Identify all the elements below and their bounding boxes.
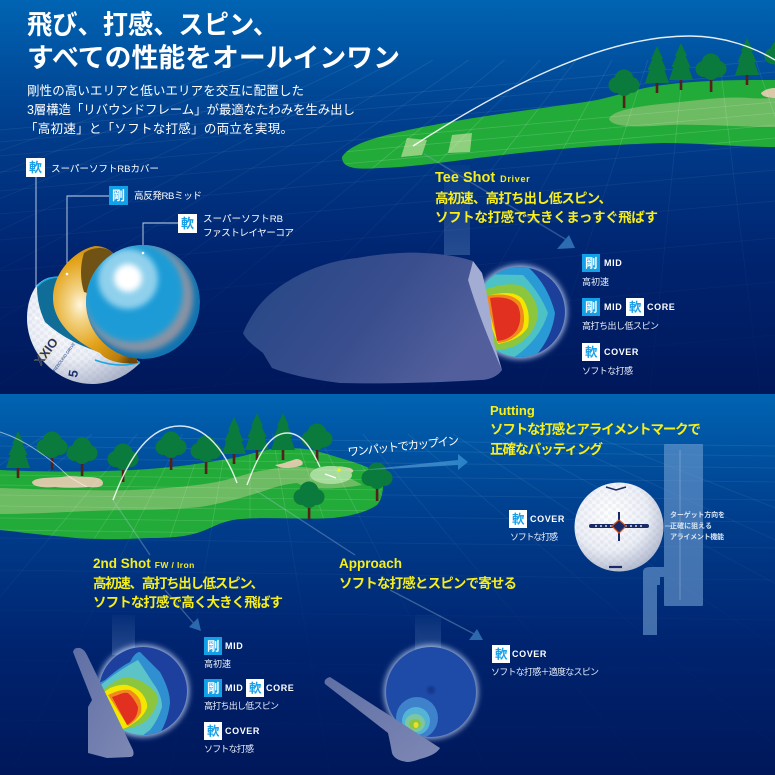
heading: 2nd shot xyxy=(93,556,283,610)
callout: approach cover: 軟 xyxy=(495,646,508,662)
arrow: one putt: ワンパットでカップイン xyxy=(347,434,460,459)
callout: putting cover: ソフトな打感 xyxy=(510,531,558,542)
layer label: core: 軟 xyxy=(181,216,194,231)
callout: cover: 軟 xyxy=(207,724,220,738)
callout: mid: MID xyxy=(604,258,622,268)
trees: tee shot hole xyxy=(608,38,775,108)
callout: mid: 剛 xyxy=(207,640,220,654)
heading: approach: Approach xyxy=(339,556,402,571)
callout: cover: ソフトな打感 xyxy=(582,365,633,376)
heading: putting xyxy=(490,403,701,457)
annotation: alignment: ターゲット方向を xyxy=(670,510,725,519)
illustration: iron head xyxy=(73,648,134,758)
callout: cover: COVER xyxy=(604,347,639,357)
heading: 2nd shot: ソフトな打感で高く大きく飛ばす xyxy=(93,594,283,610)
leader lines xyxy=(36,177,178,318)
ball cover shell: XXIO xyxy=(32,335,61,368)
mid layer xyxy=(53,246,138,363)
callout: putting cover: 軟 xyxy=(512,512,525,526)
heading: tee shot xyxy=(435,170,658,225)
heading: putting: ソフトな打感とアライメントマークで xyxy=(490,421,701,437)
layer label: core: ファストレイヤーコア xyxy=(203,228,294,239)
title: すべての性能をオールインワン xyxy=(27,43,400,73)
layer label: cover: 軟 xyxy=(29,160,42,175)
intro text xyxy=(25,83,355,136)
callout: mid and core: MID xyxy=(604,302,622,312)
annotation: alignment xyxy=(665,510,725,541)
layer label: mid: 高反発RBミッド xyxy=(134,190,202,202)
ball cover shell: REBOUND DRIVE xyxy=(52,341,76,373)
callout: mid and core xyxy=(582,298,675,331)
pointer: tee shot to driver xyxy=(424,154,575,255)
heading: approach: ソフトな打感とスピンで寄せる xyxy=(339,575,517,591)
layer label: mid: 剛 xyxy=(112,188,125,203)
diagram: driver impact heatmap xyxy=(470,258,567,362)
callout: putting cover xyxy=(509,510,565,542)
trees: green course xyxy=(6,413,392,520)
intro text: 「高初速」と「ソフトな打感」の両立を実現。 xyxy=(25,121,293,136)
diagram: ball layers xyxy=(27,177,200,384)
intro text: 3層構造「リバウンドフレーム」が最適なたわみを生み出し xyxy=(27,102,355,117)
callout: cover xyxy=(582,343,639,376)
layer label: mid xyxy=(109,186,202,205)
callout: mid: MID xyxy=(225,641,243,651)
callout: mid: 高初速 xyxy=(582,276,609,287)
panel: bottom background xyxy=(0,394,775,775)
illustration: green course xyxy=(0,448,384,540)
arrowheads xyxy=(189,618,483,640)
callout: mid xyxy=(582,254,622,287)
illustration: putter xyxy=(643,444,703,635)
panel: top background xyxy=(0,0,775,394)
heading: 2nd shot: 高初速、高打ち出し低スピン、 xyxy=(93,575,264,591)
callouts: iron xyxy=(204,637,294,754)
heading: approach xyxy=(339,556,517,591)
ball cover shell: 5 xyxy=(65,369,81,379)
callout: mid and core: 剛 xyxy=(207,682,220,696)
illustration: tee shot fairway xyxy=(342,80,775,169)
illustration: driver head xyxy=(243,253,502,383)
callout: putting cover: COVER xyxy=(530,514,565,524)
callout: cover: ソフトな打感 xyxy=(204,743,254,754)
arrow: one putt xyxy=(347,434,468,471)
title: 飛び、打感、スピン、 xyxy=(27,10,278,40)
callout: mid and core: CORE xyxy=(647,302,675,312)
heading: tee shot: Tee Shot Driver xyxy=(435,170,530,186)
callout: approach cover xyxy=(491,645,599,677)
callout: mid and core: 軟 xyxy=(249,680,262,696)
callout: mid: 剛 xyxy=(585,256,598,270)
callout: cover: COVER xyxy=(225,726,260,736)
title xyxy=(27,10,400,73)
heading: tee shot: ソフトな打感で大きくまっすぐ飛ばす xyxy=(435,209,658,225)
callout: cover: 軟 xyxy=(585,344,598,360)
layer label: cover: スーパーソフトRBカバー xyxy=(51,164,159,175)
layer label: core: スーパーソフトRB xyxy=(203,214,283,225)
callout: mid and core xyxy=(204,679,294,711)
intro text: 剛性の高いエリアと低いエリアを交互に配置した xyxy=(27,83,304,98)
heading: putting: Putting xyxy=(490,403,535,418)
callout: mid and core: 高打ち出し低スピン xyxy=(204,700,279,711)
pointers: shots to impact diagrams xyxy=(113,490,478,636)
callouts: driver xyxy=(582,254,675,376)
layer label: cover xyxy=(26,158,159,177)
callout: mid and core: MID xyxy=(225,683,243,693)
callout: mid: 高初速 xyxy=(204,658,231,669)
ball flight arc: tee shot xyxy=(413,36,775,146)
heading: 2nd shot: 2nd Shot FW / Iron xyxy=(93,556,195,571)
callout: mid and core: 軟 xyxy=(629,300,642,314)
callout: mid xyxy=(204,637,243,669)
callout: mid and core: 高打ち出し低スピン xyxy=(582,320,659,331)
callout: approach cover: COVER xyxy=(512,649,547,659)
callout: cover xyxy=(204,722,260,754)
annotation: alignment: 正確に狙える xyxy=(670,521,712,530)
diagram: wedge heatmap xyxy=(384,615,478,739)
illustration: wedge head xyxy=(325,677,440,762)
callout: mid and core: 剛 xyxy=(585,300,598,314)
ball flight arcs xyxy=(0,426,320,500)
heading: putting: 正確なパッティング xyxy=(490,441,604,457)
heading: tee shot: 高初速、高打ち出し低スピン、 xyxy=(435,190,612,206)
illustration: golf ball with alignment mark xyxy=(574,482,664,572)
core xyxy=(86,245,200,359)
diagram: iron heatmap xyxy=(95,615,189,745)
annotation: alignment: アライメント機能 xyxy=(670,532,724,541)
callout: approach cover: ソフトな打感＋適度なスピン xyxy=(491,666,599,677)
ball cover shell xyxy=(27,277,140,384)
callout: mid and core: CORE xyxy=(266,683,294,693)
layer label: core xyxy=(178,214,294,239)
